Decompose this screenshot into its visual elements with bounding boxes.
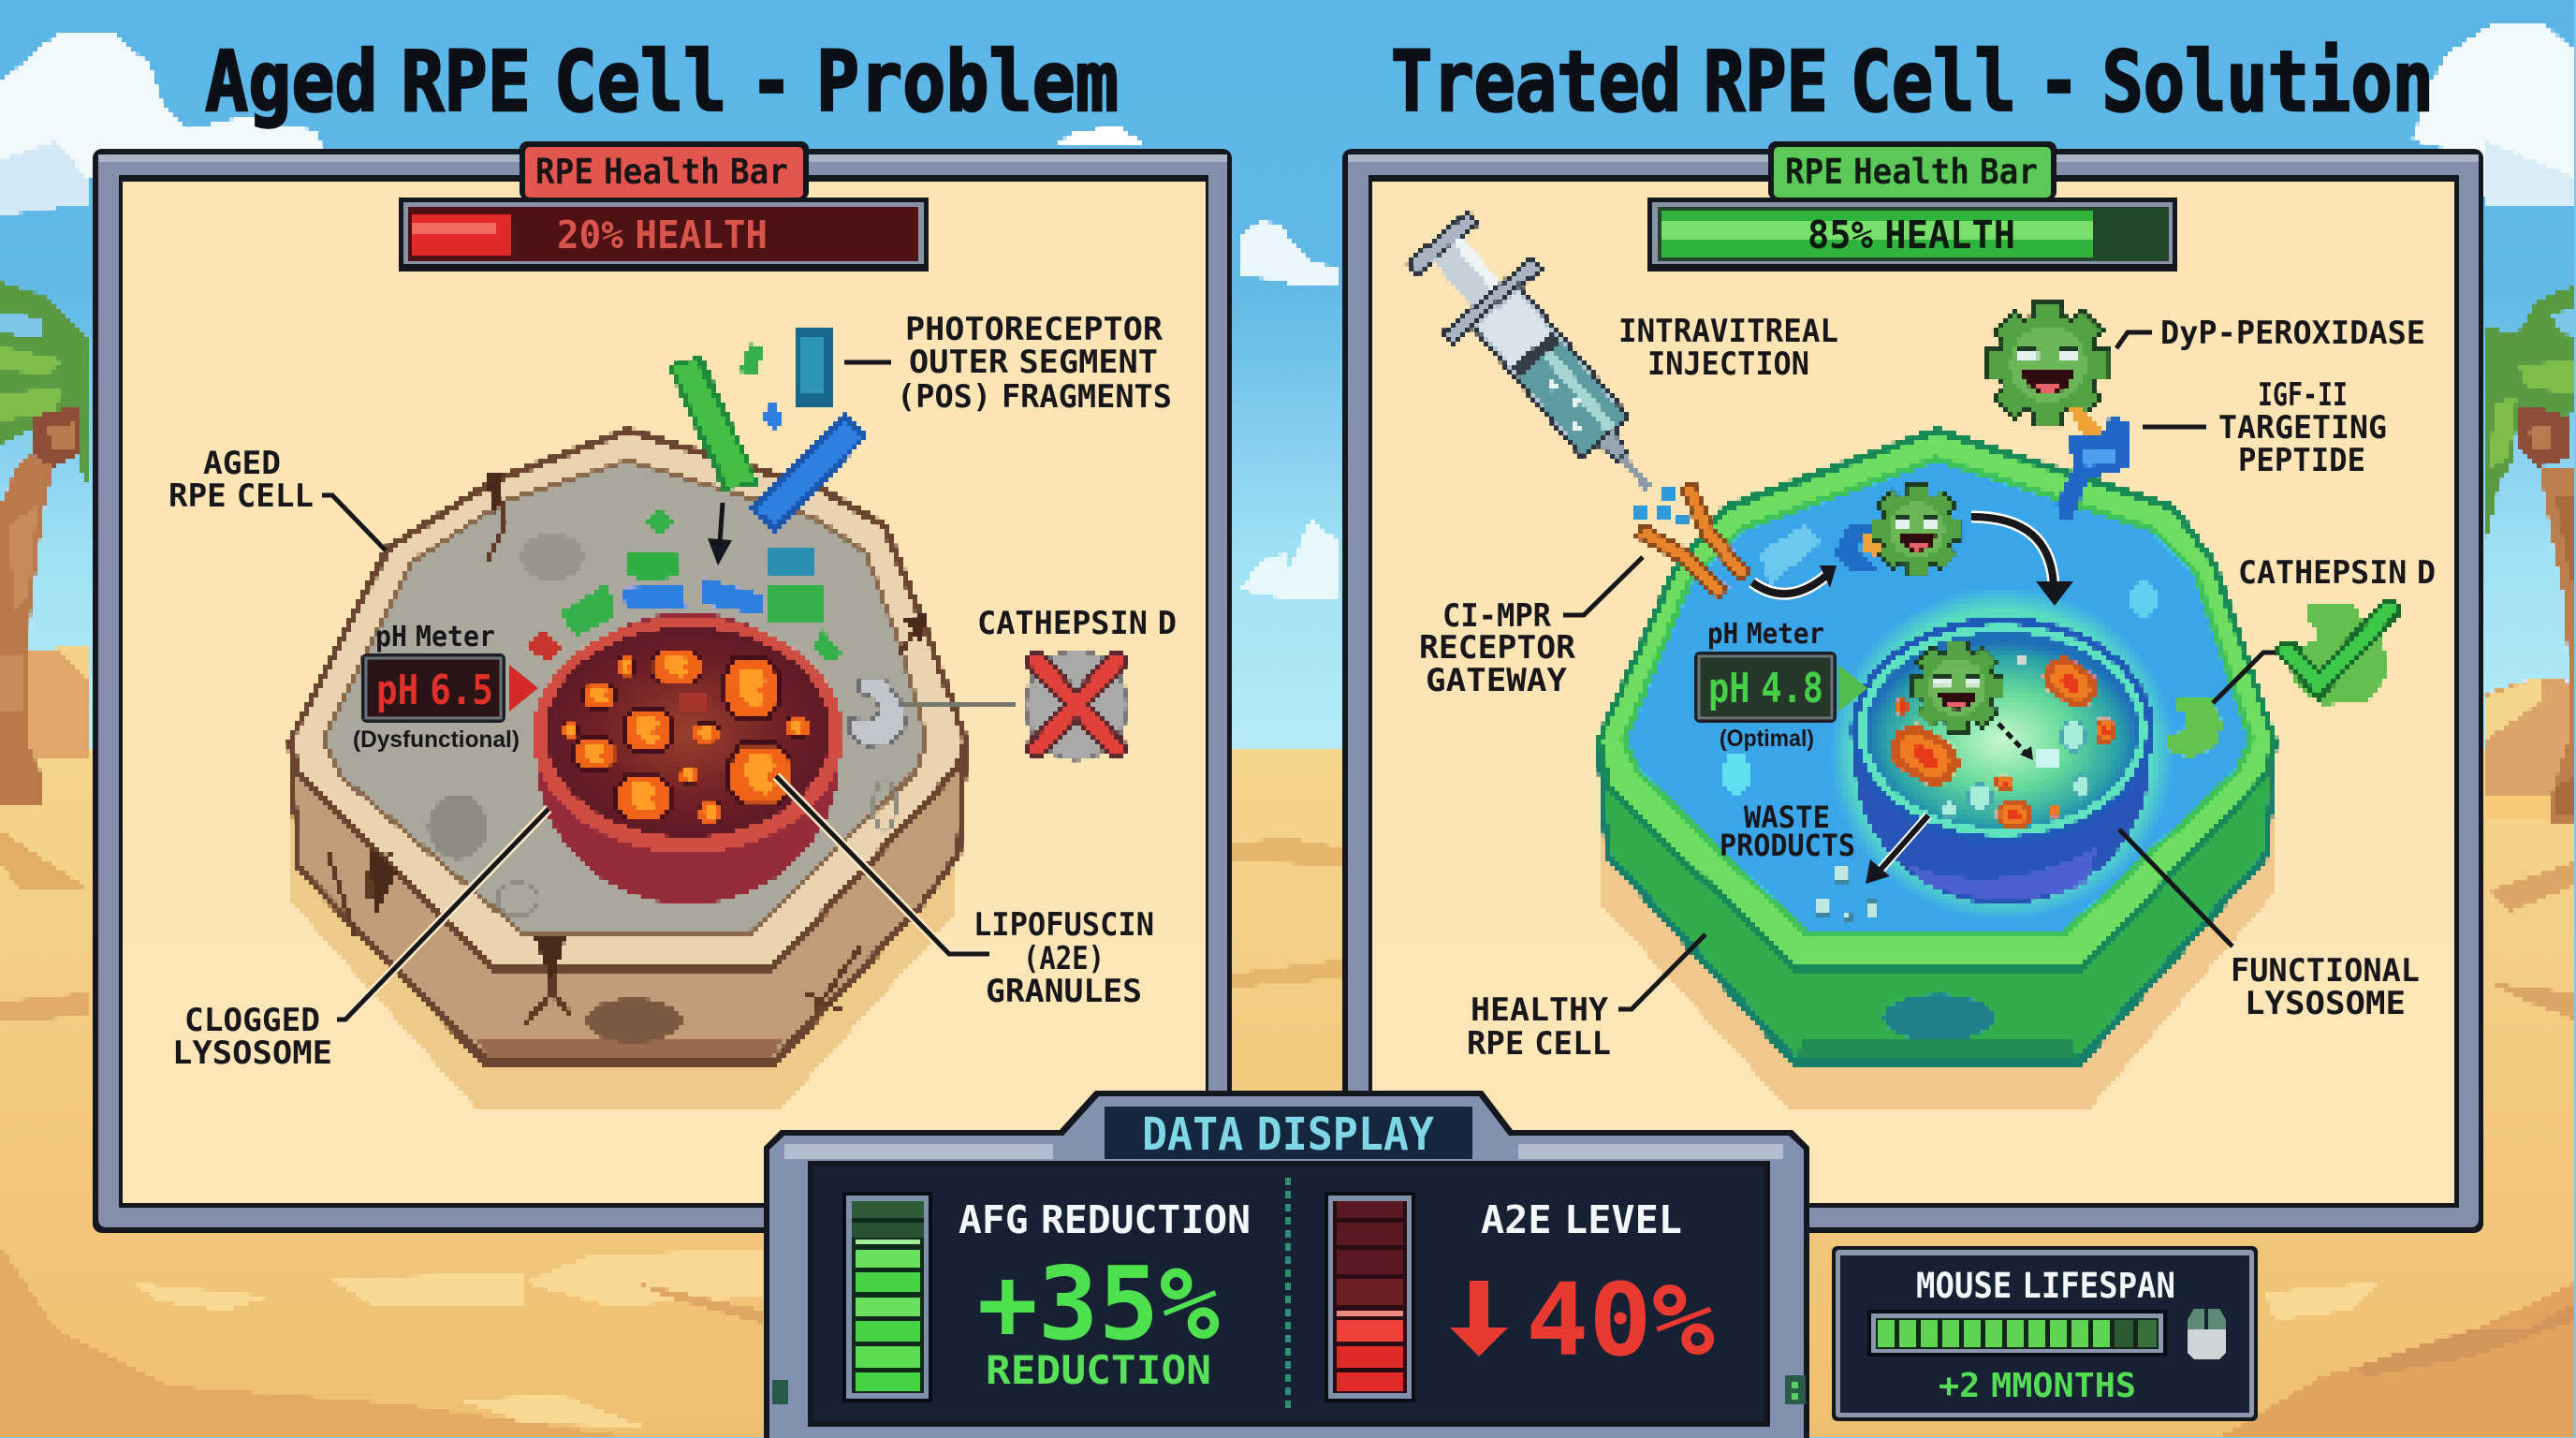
status LEDs: [772, 1375, 1806, 1404]
pH meter aged: (Dysfunctional): [353, 726, 520, 753]
illustration: aged cell: [287, 328, 1127, 1108]
health bar 85%: 85% HEALTH: [1808, 213, 2015, 257]
labels aged: (POS) FRAGMENTS: [897, 378, 1172, 416]
sand and dunes: [0, 749, 2576, 1438]
panel: mouse lifespan: MOUSE LIFESPAN: [1916, 1266, 2175, 1306]
enzyme with peptide: [1988, 304, 2131, 524]
labels treated: IGF-II: [2258, 376, 2348, 414]
pH meter treated: pH Meter: [1707, 618, 1824, 651]
labels treated: HEALTHY: [1471, 991, 1609, 1029]
labels treated: CATHEPSIN D: [2238, 554, 2436, 592]
metric: AFG reduction: +35%: [977, 1246, 1220, 1363]
labels treated: WASTE: [1744, 800, 1830, 835]
health bar 85%: [1647, 198, 2177, 271]
metric: A2E level: 40%: [1526, 1263, 1715, 1379]
labels aged: CATHEPSIN D: [977, 605, 1177, 642]
labels treated: PEPTIDE: [2238, 442, 2365, 479]
labels aged: OUTER SEGMENT: [909, 344, 1158, 381]
labels treated: GATEWAY: [1426, 662, 1568, 699]
gauge: AFG: [842, 1192, 932, 1402]
palm right: [2539, 467, 2576, 824]
labels aged: AGED: [203, 445, 281, 482]
pH meter treated: (Optimal): [1720, 726, 1814, 752]
health bar 20%: [399, 198, 929, 271]
lysosome functional: [1830, 587, 2174, 920]
labels aged: PHOTORECEPTOR: [905, 311, 1164, 348]
labels treated: [1419, 313, 2436, 1063]
labels aged: CLOGGED: [184, 1002, 320, 1039]
panel: treated RPE cell solution: [1342, 141, 2483, 1233]
labels aged: LYSOSOME: [172, 1034, 332, 1072]
POS fragments: [526, 328, 869, 663]
panel: data display: [764, 1091, 1809, 1438]
labels treated: PRODUCTS: [1720, 828, 1855, 863]
health bar tab: [1768, 141, 2056, 199]
syringe: [1394, 200, 1693, 525]
arrowheads: [1820, 565, 2073, 884]
enzyme in cytosol: [1834, 486, 1961, 574]
labels aged: [168, 311, 1177, 1072]
title: aged cell: Aged RPE Cell - Problem: [205, 33, 1119, 130]
labels treated: INTRAVITREAL: [1618, 313, 1838, 350]
metric: AFG reduction: REDUCTION: [986, 1347, 1211, 1393]
metric: A2E level: [1450, 1197, 1715, 1379]
metric: AFG reduction: AFG REDUCTION: [959, 1197, 1251, 1242]
pH meter treated: [1694, 618, 1867, 752]
leader lines aged: [322, 362, 989, 1020]
CI-MPR receptor: [1646, 492, 1741, 588]
palm left: [0, 454, 53, 803]
health bar tab: RPE Health Bar: [1785, 152, 2038, 192]
waste particles: [1816, 866, 1878, 920]
pH meter aged: pH 6.5: [376, 667, 493, 714]
health bar 20%: 20% HEALTH: [557, 213, 768, 257]
pH meter aged: [353, 621, 538, 753]
health bar tab: RPE Health Bar: [535, 152, 788, 192]
labels aged: LIPOFUSCIN: [973, 906, 1154, 944]
lifespan bar: [1867, 1310, 2167, 1357]
panel: mouse lifespan: [1832, 1246, 2258, 1421]
arrow: POS into lysosome: [708, 538, 732, 565]
leader lines and arrows treated: [1563, 332, 2276, 1009]
metric: AFG reduction: [959, 1197, 1251, 1393]
panel: aged RPE cell problem: [93, 141, 1232, 1233]
labels treated: RPE CELL: [1467, 1025, 1611, 1063]
divider: [1285, 1178, 1291, 1409]
clouds: [0, 22, 2576, 599]
labels treated: TARGETING: [2218, 409, 2387, 447]
labels aged: (A2E): [1023, 940, 1105, 977]
labels aged: RPE CELL: [168, 477, 314, 515]
cathepsin D inactive: [850, 651, 1127, 759]
cathepsin D active: [2166, 602, 2390, 758]
labels treated: LYSOSOME: [2245, 985, 2406, 1022]
labels treated: INJECTION: [1647, 345, 1809, 383]
data display title: DATA DISPLAY: [1142, 1108, 1434, 1161]
health bar tab: [520, 141, 809, 199]
metric: A2E level: A2E LEVEL: [1481, 1197, 1682, 1242]
drops: [1634, 487, 1689, 538]
gauge: A2E: [1325, 1192, 1415, 1402]
pH meter treated: pH 4.8: [1708, 665, 1823, 712]
labels aged: GRANULES: [986, 973, 1142, 1010]
pH meter aged: pH Meter: [375, 621, 495, 653]
panel: mouse lifespan: +2 MMONTHS: [1939, 1367, 2136, 1405]
labels treated: FUNCTIONAL: [2231, 952, 2420, 990]
labels treated: DyP-PEROXIDASE: [2160, 315, 2425, 352]
lysosome clogged: [533, 612, 843, 904]
icon: mouse: [2188, 1309, 2226, 1359]
labels treated: RECEPTOR: [1419, 629, 1576, 667]
labels treated: CI-MPR: [1442, 597, 1551, 635]
illustration: treated cell: [1394, 200, 2390, 1108]
